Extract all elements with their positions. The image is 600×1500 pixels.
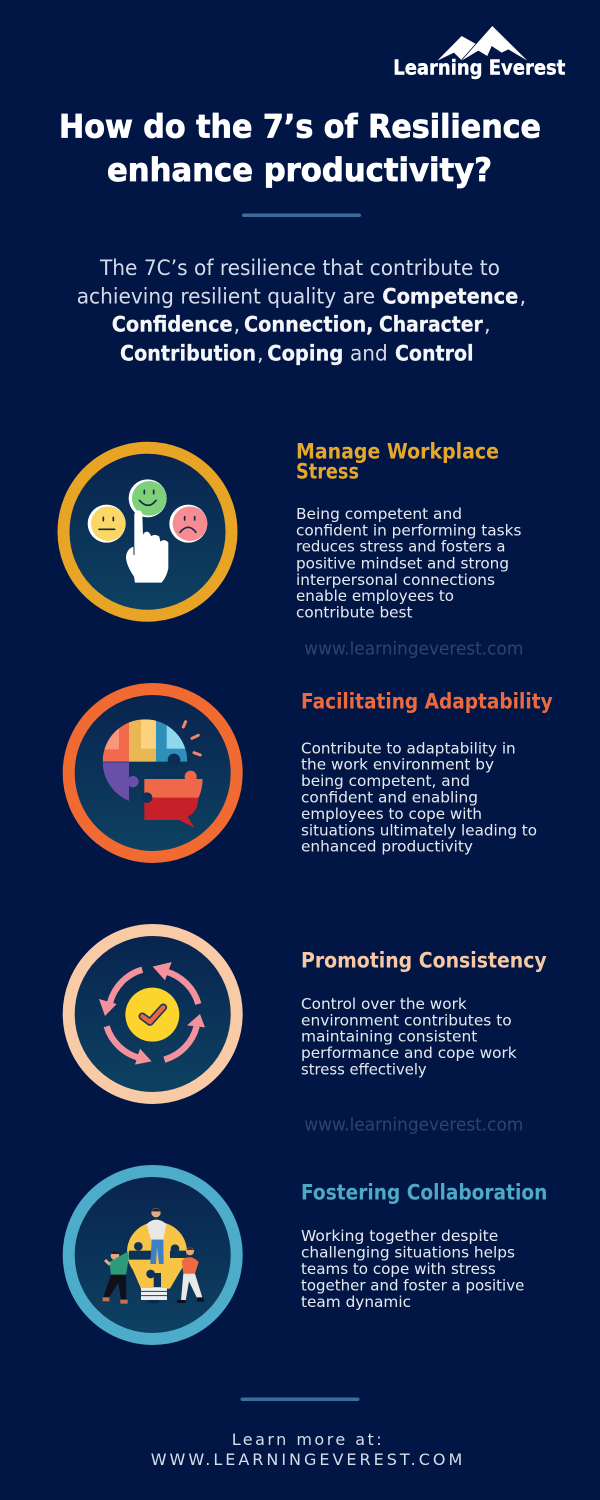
text block: Facilitating Adaptability: Facilitating Adaptability [301, 689, 553, 713]
text block: Manage Workplace Stress: confident in performing tasks [296, 522, 522, 540]
logo: Learning Everest: Learning Everest [393, 55, 566, 79]
intro text block: The 7C’s of resilience that contribute to [99, 256, 500, 280]
text block: Facilitating Adaptability [301, 689, 553, 856]
text block: Manage Workplace Stress: interpersonal connections [296, 571, 495, 589]
intro text block [77, 256, 526, 366]
intro text block: Competence [382, 284, 518, 308]
intro text block: Control [395, 342, 474, 366]
text block: Facilitating Adaptability: Contribute to adaptability in [301, 739, 516, 757]
text block: Manage Workplace Stress: enable employees to [296, 587, 454, 605]
intro text block: Coping [267, 342, 343, 366]
watermark: www.learningeverest.com [304, 638, 523, 659]
intro text block: , [484, 313, 491, 337]
intro text block: , [520, 284, 526, 308]
text block: Promoting Consistency: Control over the work [301, 995, 467, 1013]
text block: Manage Workplace Stress: Stress [296, 459, 359, 483]
text block: Manage Workplace Stress: Manage Workplace [296, 439, 499, 463]
title: enhance productivity? [107, 151, 492, 189]
footer: learn more: WWW.LEARNINGEVEREST.COM [151, 1450, 462, 1469]
intro text block: achieving resilient quality are [77, 284, 375, 308]
text block: Fostering Collaboration: Working together despite [301, 1227, 498, 1245]
text block: Facilitating Adaptability: confident and enabling [301, 788, 478, 806]
logo: Learning Everest [393, 26, 566, 79]
text block: Fostering Collaboration: teams to cope with stress [301, 1260, 496, 1278]
icon: cycle arrows with check mark [69, 930, 237, 1098]
text block: Facilitating Adaptability: enhanced productivity [301, 838, 473, 856]
text block: Promoting Consistency: stress effectively [301, 1061, 427, 1079]
intro text block: Connection, [244, 313, 374, 337]
footer divider [240, 1398, 360, 1401]
intro text block: and [350, 342, 388, 366]
text block: Fostering Collaboration: challenging situations helps [301, 1244, 515, 1262]
text block: Promoting Consistency [301, 948, 547, 1079]
footer: learn more [151, 1430, 462, 1469]
footer: learn more: Learn more at: [232, 1430, 382, 1449]
text block: Facilitating Adaptability: being competent, and [301, 772, 470, 790]
title: How do the 7’s of Resilience [59, 108, 541, 146]
text block: Fostering Collaboration [301, 1180, 547, 1311]
text block: Manage Workplace Stress: Being competent and [296, 505, 462, 523]
intro text block: Character [379, 313, 483, 337]
text block: Manage Workplace Stress: positive mindset and strong [296, 554, 509, 572]
icon: team building a puzzle light bulb [69, 1171, 237, 1339]
text block: Manage Workplace Stress [296, 439, 522, 622]
title divider [242, 214, 361, 217]
icon: puzzle head with speech bubble [69, 689, 237, 857]
watermark: www.learningeverest.com [304, 1115, 523, 1136]
text block: Promoting Consistency: environment contributes to [301, 1011, 512, 1029]
text block: Facilitating Adaptability: situations ultimately leading to [301, 821, 537, 839]
text block: Promoting Consistency: Promoting Consistency [301, 948, 547, 972]
text block: Promoting Consistency: performance and cope work [301, 1044, 517, 1062]
text block: Manage Workplace Stress: contribute best [296, 604, 412, 622]
text block: Manage Workplace Stress: reduces stress and fosters a [296, 538, 506, 556]
title [59, 108, 541, 189]
icon: feedback faces and pointing hand [64, 448, 232, 616]
text block: Facilitating Adaptability: employees to cope with [301, 805, 482, 823]
text block: Facilitating Adaptability: the work environment by [301, 756, 494, 774]
intro text block: , [234, 313, 240, 337]
intro text block: Contribution [120, 342, 256, 366]
intro text block: , [257, 342, 264, 366]
text block: Fostering Collaboration: together and foster a positive [301, 1276, 524, 1294]
text block: Promoting Consistency: maintaining consistent [301, 1028, 477, 1046]
intro text block: Confidence [112, 313, 233, 337]
text block: Fostering Collaboration: Fostering Collaboration [301, 1180, 547, 1204]
text block: Fostering Collaboration: team dynamic [301, 1293, 411, 1311]
